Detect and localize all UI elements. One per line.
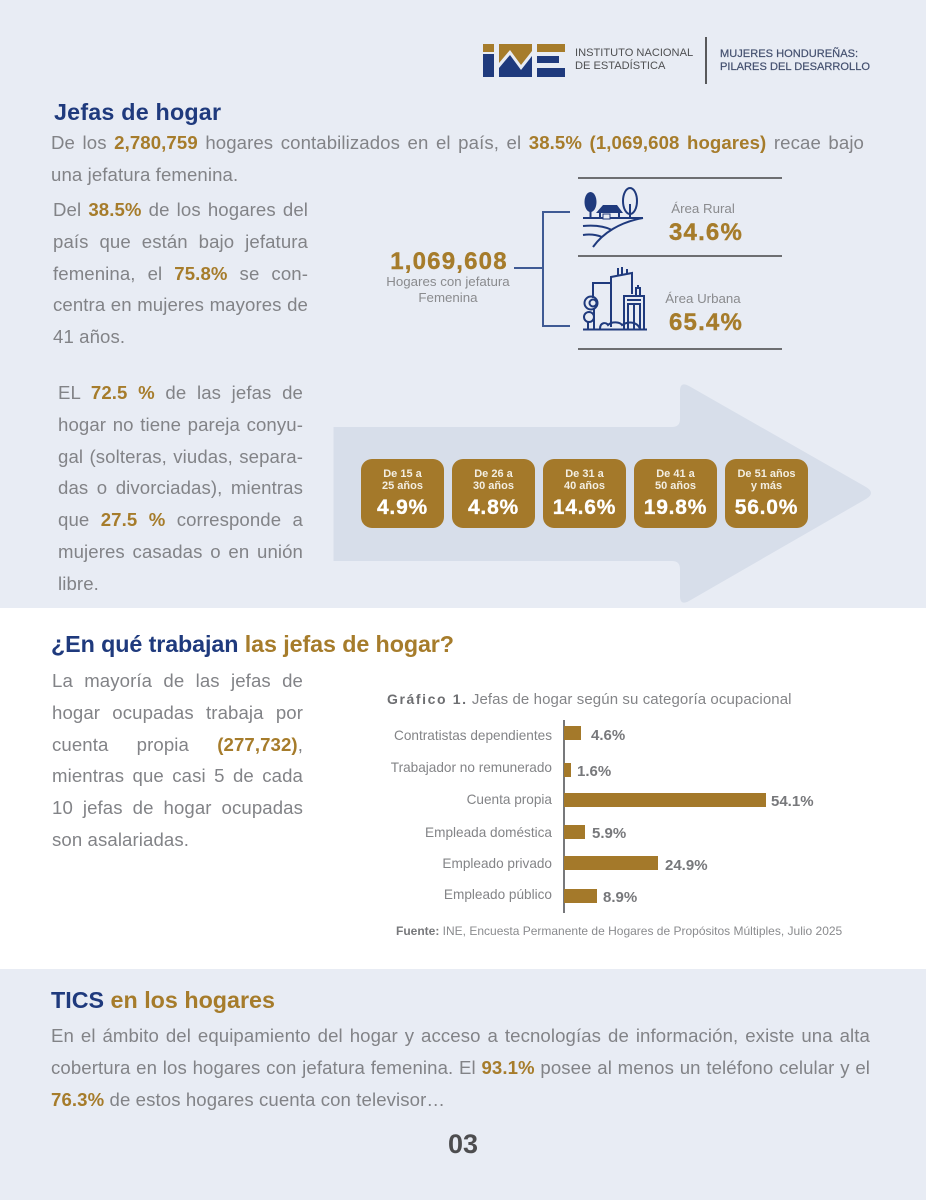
row: cuenta propia <box>467 792 814 810</box>
age card: 41 to 50 <box>634 459 717 528</box>
chart title: Gráfico 1. Jefas de hogar según su categoría ocupacional <box>387 691 792 708</box>
age card: 51 and over: 56.0% <box>735 496 798 519</box>
age card: 51 and over <box>725 459 808 528</box>
icon: urban buildings and trees <box>583 267 647 330</box>
age card: 31 to 40: 14.6% <box>553 496 616 519</box>
arrow with age groups <box>334 384 871 602</box>
text: intro paragraph <box>51 132 864 185</box>
row: empleado publico: 8.9% <box>603 889 637 906</box>
total households caption: Femenina <box>418 290 478 305</box>
text: occupations paragraph: La mayoría de las jefas de <box>52 670 303 691</box>
text: TICS paragraph: 76.3% de estos hogares cuenta con televisor… <box>51 1089 445 1110</box>
text: age concentration paragraph: 41 años. <box>53 326 125 347</box>
tree bracket and divider lines <box>514 177 782 350</box>
diagram: households by area <box>386 177 782 350</box>
value: rural area: 34.6% <box>669 219 743 246</box>
text: age concentration paragraph: centra en mujeres mayores de <box>53 294 308 315</box>
total households caption <box>386 274 510 305</box>
age card: 51 and over: De 51 años <box>737 468 796 480</box>
publication title: PILARES DEL DESARROLLO <box>720 61 870 73</box>
row: contratistas dependientes: Contratistas dependientes <box>394 728 552 743</box>
row: contratistas dependientes <box>394 726 625 744</box>
institute name: DE ESTADÍSTICA <box>575 60 665 72</box>
text: age concentration paragraph: femenina, el 75.8% se con- <box>53 263 308 284</box>
text: marital status paragraph: EL 72.5 % de las jefas de <box>58 382 303 403</box>
heading: Jefas de hogar: Jefas de hogar <box>54 99 221 125</box>
age card: 31 to 40 <box>543 459 626 528</box>
icon: INE logo <box>483 44 565 77</box>
publication title <box>720 47 870 73</box>
text: marital status paragraph: gal (solteras, viudas, separa- <box>58 446 303 467</box>
text: marital status paragraph <box>58 382 303 594</box>
text: occupations paragraph: 10 jefas de hogar ocupadas <box>52 797 303 818</box>
icon: rural house and trees <box>582 187 644 248</box>
row: cuenta propia: Cuenta propia <box>467 792 552 807</box>
value: urban area: 65.4% <box>669 309 743 336</box>
text: occupations paragraph: son asalariadas. <box>52 829 189 850</box>
age card: 41 to 50: De 41 a <box>656 468 695 480</box>
text: marital status paragraph: mujeres casadas o en unión <box>58 541 303 562</box>
row: empleado privado: 24.9% <box>665 857 708 874</box>
row: trabajador no remunerado: Trabajador no remunerado <box>391 760 552 775</box>
label: rural area: Área Rural <box>671 201 735 216</box>
text: occupations paragraph: mientras que casi 5 de cada <box>52 765 303 786</box>
total households caption: Hogares con jefatura <box>386 274 510 289</box>
heading: occupations: ¿En qué trabajan las jefas de hogar? <box>51 631 454 657</box>
age card: 51 and over: y más <box>751 480 782 492</box>
text: marital status paragraph: que 27.5 % corresponde a <box>58 509 303 530</box>
row: cuenta propia: 54.1% <box>771 793 814 810</box>
text: age concentration paragraph: país que están bajo jefatura <box>53 231 308 252</box>
total households: 1,069,608 <box>390 248 508 275</box>
panel: white occupations band <box>0 608 926 969</box>
text: occupations paragraph: cuenta propia (277,732), <box>52 734 303 755</box>
chart source: Fuente: INE, Encuesta Permanente de Hogares de Propósitos Múltiples, Julio 2025 <box>396 924 842 938</box>
institute name: INSTITUTO NACIONAL <box>575 47 693 59</box>
age card: 15 to 25: 25 años <box>382 480 423 492</box>
age card: 26 to 30: 4.8% <box>468 496 519 519</box>
text: occupations paragraph: hogar ocupadas trabaja por <box>52 702 303 723</box>
age card: 15 to 25 <box>361 459 444 528</box>
text: occupations paragraph <box>52 670 303 850</box>
text: marital status paragraph: libre. <box>58 573 99 594</box>
text: intro paragraph: una jefatura femenina. <box>51 164 238 185</box>
age card: 41 to 50: 50 años <box>655 480 696 492</box>
publication title: MUJERES HONDUREÑAS: <box>720 48 858 60</box>
row: empleada domestica: Empleada doméstica <box>425 825 552 840</box>
row: empleado publico: Empleado público <box>444 887 552 902</box>
row: empleada domestica: 5.9% <box>592 825 626 842</box>
institute name <box>575 47 693 72</box>
text: marital status paragraph: hogar no tiene pareja conyu- <box>58 414 303 435</box>
age card: 26 to 30 <box>452 459 535 528</box>
text: age concentration paragraph: Del 38.5% de los hogares del <box>53 199 308 220</box>
age card: 31 to 40: 40 años <box>564 480 605 492</box>
text: TICS paragraph: cobertura en los hogares con jefatura femenina. El 93.1% posee al menos un teléfono celular y el <box>51 1057 870 1078</box>
label: urban area: Área Urbana <box>665 291 741 306</box>
text: intro paragraph: De los 2,780,759 hogares contabilizados en el país, el 38.5% (1,069,608 hogares) recae bajo <box>51 132 864 153</box>
row: contratistas dependientes: 4.6% <box>591 727 625 744</box>
arrow shape <box>334 384 871 602</box>
age card: 26 to 30: De 26 a <box>474 468 513 480</box>
page number: 03 <box>448 1129 478 1159</box>
divider <box>705 37 707 84</box>
row: trabajador no remunerado: 1.6% <box>577 763 611 780</box>
chart axis <box>563 720 565 913</box>
text: age concentration paragraph <box>53 199 308 347</box>
row: empleada domestica <box>425 825 626 842</box>
age card: 26 to 30: 30 años <box>473 480 514 492</box>
text: TICS paragraph: En el ámbito del equipamiento del hogar y acceso a tecnologías de información, existe una alta <box>51 1025 870 1046</box>
row: trabajador no remunerado <box>391 760 611 780</box>
age card: 31 to 40: De 31 a <box>565 468 604 480</box>
header logos <box>483 37 870 84</box>
text: TICS paragraph <box>51 1025 870 1110</box>
age card: 15 to 25: 4.9% <box>377 496 428 519</box>
text: marital status paragraph: das o divorciadas), mientras <box>58 477 303 498</box>
row: empleado privado: Empleado privado <box>442 856 552 871</box>
row: empleado privado <box>442 856 708 874</box>
heading: TICS: TICS en los hogares <box>51 987 275 1013</box>
row: empleado publico <box>444 887 637 906</box>
age card: 15 to 25: De 15 a <box>383 468 422 480</box>
age card: 41 to 50: 19.8% <box>644 496 707 519</box>
bar chart: occupational category <box>387 691 842 938</box>
